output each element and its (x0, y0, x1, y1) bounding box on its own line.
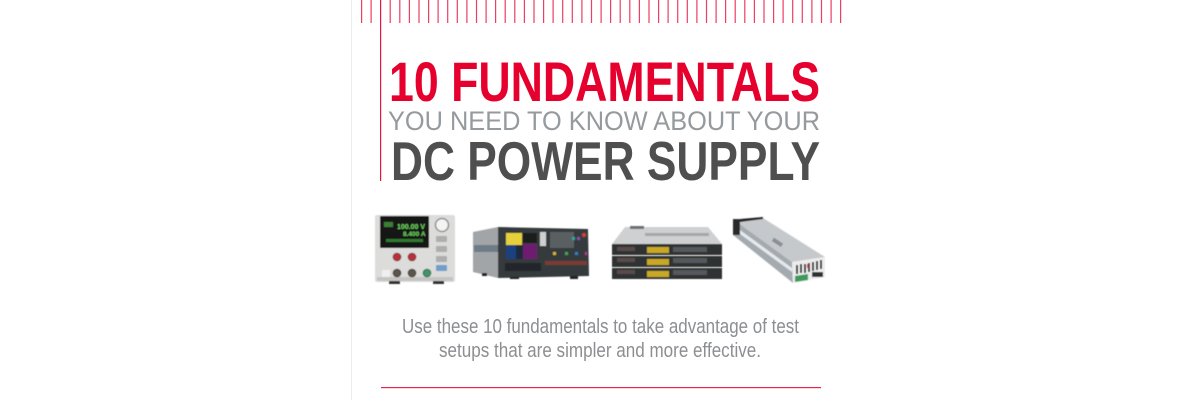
product: bench power supply (375, 215, 455, 284)
product: stacked rack supplies (612, 226, 722, 279)
intro text (402, 316, 799, 362)
top tick strip (361, 0, 841, 23)
title: 10 fundamentals: 10 FUNDAMENTALS (389, 50, 820, 113)
product photos (375, 215, 825, 284)
product: system power module (733, 217, 825, 283)
subtitle: you need to know: YOU NEED TO KNOW ABOUT YOUR (388, 106, 820, 136)
product: modular power system (473, 227, 589, 279)
product: bench power supply: 100.00 V (397, 224, 425, 231)
title block (388, 50, 820, 192)
vertical accent line (380, 0, 381, 181)
product: bench power supply: 8.400 A (403, 231, 426, 238)
bottom red rule (381, 387, 821, 388)
intro line 1: Use these 10 fundamentals to take advantage of test (402, 316, 799, 338)
intro line 2: setups that are simpler and more effective. (439, 340, 761, 362)
title: dc power supply: DC POWER SUPPLY (391, 130, 820, 192)
